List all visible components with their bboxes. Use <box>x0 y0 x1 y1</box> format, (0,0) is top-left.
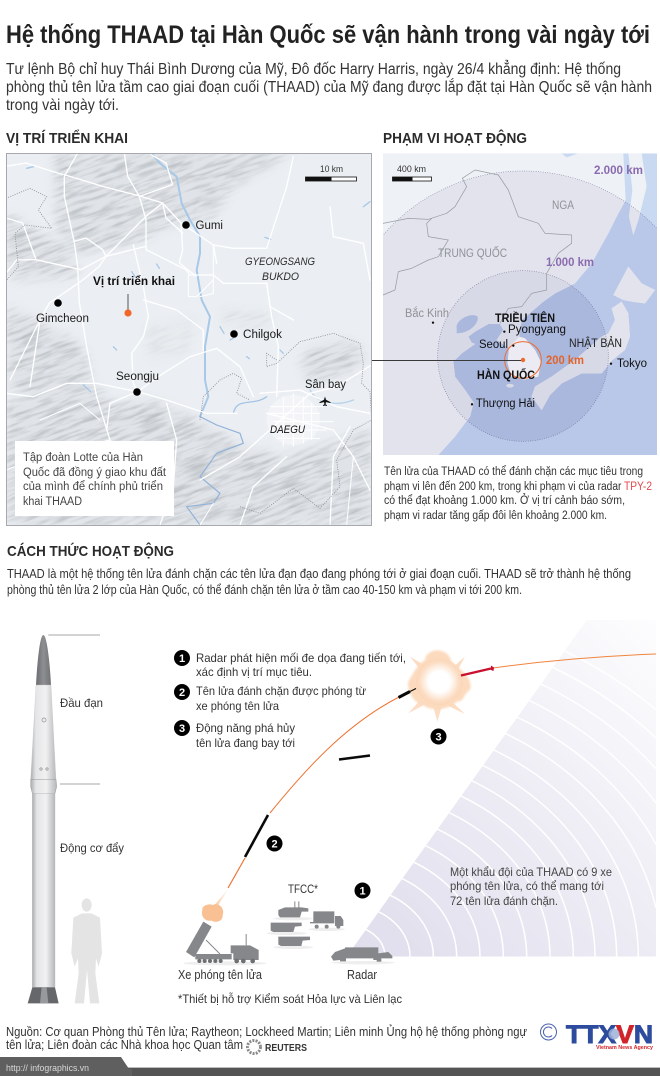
incoming missile <box>461 666 494 676</box>
radar vehicle <box>331 947 395 964</box>
text: range description: phạm vi lên đến 200 km, trong khi phạm vi của radar TPY-2 <box>384 481 652 493</box>
intro paragraph <box>6 60 652 114</box>
callout: Lotte land: Quốc đã đồng ý giao khu đất <box>23 467 167 479</box>
step 3: 3 <box>179 723 185 735</box>
badge 2: 2 <box>271 838 278 850</box>
text: battery note <box>450 865 612 908</box>
label: TFCC: TFCC* <box>288 882 318 896</box>
callout: Lotte land: của mình để chính phủ triển <box>23 481 163 493</box>
steps list <box>174 650 406 750</box>
step 3: tên lửa đang bay tới <box>196 736 295 750</box>
city: Gimcheon <box>36 299 89 325</box>
scale bar: 10 km <box>306 164 356 181</box>
range circles <box>384 170 656 234</box>
country and city labels: TRUNG QUỐC <box>438 246 507 260</box>
country and city labels: NGA <box>552 200 574 212</box>
marker: deployment site: Vị trí triển khai <box>93 276 175 288</box>
label: Gyeongsang Bukdo <box>245 256 315 283</box>
footer bar <box>0 1057 660 1076</box>
source <box>6 1024 527 1052</box>
city: Chilgok: Chilgok <box>243 329 282 341</box>
badge 3 <box>430 728 446 744</box>
label: 2000 km: 2.000 km <box>594 165 643 177</box>
country and city labels: Tokyo <box>617 358 647 370</box>
source: Nguồn: Cơ quan Phòng thủ Tên lửa; Raytheon; Lockheed Martin; Liên minh Ủng hộ hệ thống phòng ngự <box>6 1024 527 1039</box>
interceptor in flight <box>245 688 416 857</box>
step 2: 2 <box>179 687 185 699</box>
text: how it works description <box>7 567 631 597</box>
text: battery note: phóng tên lửa, có thể mang tới <box>450 879 604 893</box>
site dot <box>521 358 525 362</box>
explosion <box>408 650 471 722</box>
panel: deployment map <box>6 153 372 526</box>
Reuters logo <box>248 1040 307 1054</box>
marker: deployment site <box>93 276 175 317</box>
badge 2 <box>266 836 282 852</box>
trajectory: incoming and interceptor <box>228 654 656 888</box>
text: how it works description: phòng thủ tên lửa 2 lớp của Hàn Quốc, có thể đánh chặn tên lửa ở tầm cao 40-150 km và phạm vi tới 200 km. <box>7 583 522 597</box>
step 1: xác định vị trí mục tiêu. <box>196 665 312 679</box>
city <box>267 395 320 445</box>
airport: Sân bay <box>305 379 346 391</box>
provincial borders <box>6 188 372 513</box>
city: Seongju <box>116 371 159 396</box>
step 3: Động năng phá hủy <box>196 721 295 735</box>
radar fan <box>354 646 656 956</box>
TTXVN logo: TTXVN <box>566 1021 653 1049</box>
label: warhead: Đầu đạn <box>60 696 103 710</box>
scale bar: 10 km: 10 km <box>320 164 343 175</box>
copyright symbol <box>540 1024 556 1040</box>
connector line <box>372 360 523 362</box>
panel: range map <box>372 154 657 455</box>
text: battery note: Một khẩu đội của THAAD có 9 xe <box>450 865 612 879</box>
heading: operating range: PHẠM VI HOẠT ĐỘNG <box>383 129 527 147</box>
country and city labels: NHẬT BẢN <box>569 337 622 350</box>
city: Gumi: Gumi <box>196 220 223 232</box>
badge 1 <box>354 882 370 898</box>
borders <box>383 170 572 323</box>
label: Daegu: DAEGU <box>270 424 305 436</box>
intro paragraph: trong vài ngày tới. <box>6 97 119 114</box>
step 1: Radar phát hiện mối đe dọa đang tiến tới, <box>196 651 406 665</box>
scale bar: 400 km: 400 km <box>397 164 426 175</box>
heading: deployment location: VỊ TRÍ TRIỂN KHAI <box>6 129 128 147</box>
city: Gimcheon: Gimcheon <box>36 313 89 325</box>
text: range description: phạm vi radar tăng gấp đôi lên khoảng 2.000 km. <box>384 510 607 522</box>
label: launcher: Xe phóng tên lửa <box>178 968 262 982</box>
label: 1000 km: 1.000 km <box>546 257 594 269</box>
scale bar: 400 km <box>392 164 432 181</box>
launcher vehicle <box>183 888 267 965</box>
country and city labels: TRIỀU TIÊN <box>495 312 555 325</box>
step 3 <box>174 720 295 750</box>
badge 1: 1 <box>359 886 366 898</box>
footer bar: http:// infographics.vn <box>6 1063 89 1074</box>
airport <box>305 379 346 406</box>
Reuters logo: REUTERS <box>265 1043 307 1054</box>
step 2: Tên lửa đánh chặn được phóng từ <box>196 684 366 698</box>
badge 3: 3 <box>435 732 442 744</box>
footnote: *Thiết bị hỗ trợ Kiểm soát Hỏa lực và Liên lạc <box>178 991 402 1006</box>
land <box>383 153 655 455</box>
country and city labels: HÀN QUỐC <box>477 368 535 382</box>
roads <box>6 153 372 525</box>
TFCC vehicles <box>267 901 345 949</box>
source: tên lửa; Liên đoàn các Nhà khoa học Quan tâm <box>6 1038 243 1052</box>
callout: Lotte land <box>15 441 174 516</box>
country and city labels: Seoul <box>479 339 508 351</box>
label: Gyeongsang Bukdo: GYEONGSANG <box>245 256 315 268</box>
label: booster: Động cơ đẩy <box>60 841 124 855</box>
label: Gyeongsang Bukdo: BUKDO <box>262 271 299 283</box>
city: Seongju: Seongju <box>116 371 159 383</box>
country and city labels: Pyongyang <box>508 324 566 336</box>
country and city labels: Bắc Kinh <box>405 307 449 320</box>
human silhouette <box>71 898 102 1003</box>
country and city labels: Thượng Hải <box>476 398 535 410</box>
step 1 <box>174 650 406 679</box>
text: battery note: 72 tên lửa đánh chặn. <box>450 894 558 908</box>
text: range description: có thể đạt khoảng 1.000 km. Ở vị trí cảnh báo sớm, <box>384 494 625 507</box>
callout: Lotte land: Tập đoàn Lotte của Hàn <box>23 452 143 464</box>
city: Gumi <box>182 220 223 232</box>
step 2 <box>174 684 366 713</box>
label: 200 km: 200 km <box>546 355 584 367</box>
TTXVN logo: Vietnam News Agency <box>596 1045 654 1051</box>
step 2: xe phóng tên lửa <box>196 699 279 713</box>
step 1: 1 <box>179 653 185 665</box>
callout: Lotte land: khai THAAD <box>23 496 82 508</box>
heading: how it works: CÁCH THỨC HOẠT ĐỘNG <box>7 542 174 560</box>
text: range description <box>384 466 652 522</box>
terrain <box>7 154 371 525</box>
missile diagram <box>28 635 100 1003</box>
label: radar: Radar <box>347 968 377 982</box>
rivers <box>27 153 370 525</box>
country and city labels <box>405 200 647 410</box>
